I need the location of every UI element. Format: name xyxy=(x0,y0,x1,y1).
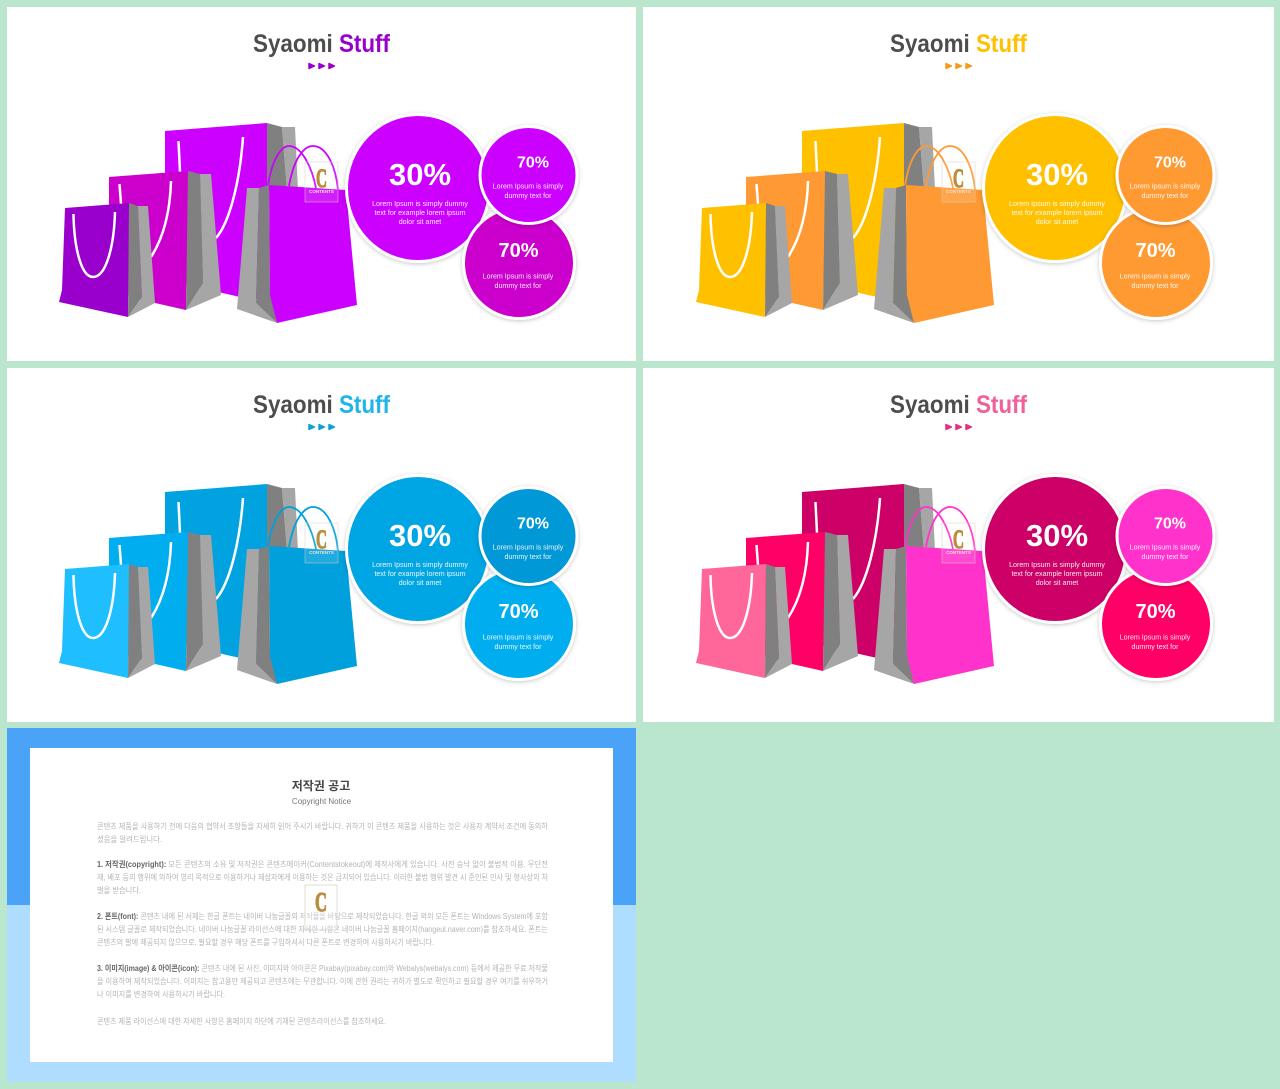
bag: medium xyxy=(109,532,221,671)
circle: 30%: 30% xyxy=(1026,518,1088,553)
circle: 30%: text for example lorem ipsum xyxy=(1011,209,1103,217)
circle: lower 70%: Lorem Ipsum is simply xyxy=(483,272,554,280)
notice intro: 셨음을 알려드립니다. xyxy=(97,834,162,844)
circle: upper 70%: dummy text for xyxy=(505,553,552,561)
notice intro xyxy=(97,821,549,844)
circle: upper 70%: 70% xyxy=(1154,516,1186,532)
circle: 30%: 30% xyxy=(1026,157,1088,192)
circle: upper 70%: dummy text for xyxy=(1142,192,1189,200)
circle: upper 70%: 70% xyxy=(517,516,549,532)
panel: copyright notice xyxy=(7,728,636,1082)
notice section 2: 콘텐츠의 팔에 제공되지 않으므로, 필요할 경우 해당 폰트를 구입하셔서 다른 폰트로 변경하여 사용하시기 바랍니다. xyxy=(97,937,434,947)
watermark xyxy=(305,885,337,930)
bag: medium xyxy=(109,171,221,310)
circle: lower 70% xyxy=(1100,208,1212,318)
circle: lower 70%: 70% xyxy=(1135,240,1176,262)
icon: three arrows xyxy=(309,64,334,68)
bag: front right xyxy=(874,507,994,684)
circle: 30%: text for example lorem ipsum xyxy=(374,209,466,217)
circle: upper 70%: 70% xyxy=(1154,154,1186,172)
notice section 1: 벌을 받습니다. xyxy=(97,885,141,895)
circle: 30% xyxy=(984,476,1126,622)
panel: yellow shopping bags xyxy=(643,7,1274,361)
circle: lower 70% xyxy=(464,568,574,680)
watermark xyxy=(942,523,975,563)
circle: lower 70%: Lorem Ipsum is simply xyxy=(483,634,554,642)
circle: 30%: Lorem Ipsum is simply dummy xyxy=(372,561,468,569)
notice heading: 저작권 공고 xyxy=(292,778,350,793)
watermark xyxy=(942,162,975,202)
circle: 30%: Lorem Ipsum is simply dummy xyxy=(1009,561,1105,569)
notice section 1: 1. 저작권(copyright): 모든 콘텐츠의 소유 및 저작권은 콘텐츠메이커(Contentstokeout)에 제작사에게 있습니다. 사전 승낙 없이 불법적 이용, 무단전 xyxy=(97,859,548,869)
title: Syaomi Stuff xyxy=(890,391,1028,419)
circle: upper 70% xyxy=(480,488,577,584)
panel: pink shopping bags xyxy=(643,368,1274,722)
circle: 30%: dolor sit amet xyxy=(399,579,441,587)
circle: lower 70% xyxy=(1100,568,1212,680)
watermark xyxy=(305,523,338,563)
bag: medium xyxy=(746,532,858,671)
circle: upper 70%: 70% xyxy=(517,154,549,172)
circle: lower 70%: Lorem Ipsum is simply xyxy=(1120,634,1191,642)
circle: 30%: text for example lorem ipsum xyxy=(374,570,466,578)
notice intro: 콘텐츠 제품을 사용하기 전에 다음의 협약서 조항들을 자세히 읽어 주시기 바랍니다. 귀하가 이 콘텐츠 제품을 사용하는 것은 사용자 계약서 조건에 동의하 xyxy=(97,821,549,831)
bag: front right xyxy=(874,146,994,323)
title: Syaomi Stuff xyxy=(890,30,1028,58)
bag: large back xyxy=(165,484,298,661)
notice section 1: 재, 배포 등의 행위에 의하여 영리 목적으로 이용하거나 제삼자에게 이용하는 것은 금지되어 있습니다. 이러한 불법 행위 발견 시 준인된 민사 및 형사상의 처 xyxy=(97,872,548,882)
circle: lower 70%: 70% xyxy=(498,240,539,262)
circle: 30%: text for example lorem ipsum xyxy=(1011,570,1103,578)
icon: three arrows xyxy=(309,424,334,430)
circle: 30%: dolor sit amet xyxy=(1036,218,1078,226)
notice section 1 xyxy=(97,859,548,895)
bag: front right xyxy=(237,507,357,684)
circle: upper 70% xyxy=(480,126,577,224)
title: Syaomi Stuff xyxy=(253,30,391,58)
notice closing line: 콘텐츠 제품 라이선스에 대한 자세한 사항은 홈페이지 하단에 기재된 콘텐츠라이선스를 참조하세요. xyxy=(97,1016,386,1026)
circle: lower 70%: 70% xyxy=(498,601,539,623)
circle: lower 70%: dummy text for xyxy=(1132,282,1179,290)
circle: lower 70%: Lorem Ipsum is simply xyxy=(1120,272,1191,280)
circle: lower 70%: dummy text for xyxy=(495,643,542,651)
circle: lower 70% xyxy=(464,208,574,318)
watermark xyxy=(305,162,338,202)
circle: upper 70% xyxy=(1117,488,1214,584)
notice section 2 xyxy=(97,911,549,947)
bag: front right xyxy=(237,146,357,323)
notice section 3 xyxy=(97,963,548,999)
circle: upper 70%: Lorem Ipsum is simply xyxy=(493,544,564,552)
circle: upper 70%: dummy text for xyxy=(1142,553,1189,561)
bag: large back xyxy=(802,484,935,661)
notice section 2: 된 시스템 글꼴로 제작되었습니다. 네이버 나눔글꼴 라이선스에 대한 자세한 사항은 네이버 나눔글꼴 홈페이지(hangeul.naver.com)를 참조하세요. 폰트는 xyxy=(97,924,548,934)
notice section 2: 2. 폰트(font): 콘텐츠 내에 된 서체는 한글 폰트는 네이버 나눔글꼴의 저작물을 바탕으로 제작되었습니다. 한글 외의 모든 폰트는 Windows System에 포함 xyxy=(97,911,549,921)
circle: upper 70%: Lorem Ipsum is simply xyxy=(1130,544,1201,552)
circle: upper 70%: Lorem Ipsum is simply xyxy=(1130,182,1201,190)
notice section 3: 3. 이미지(image) & 아이콘(icon): 콘텐츠 내에 된 사진, 이미지와 아이콘은 Pixabay(pixabay.com)와 Webalys(webalys.com) 등에서 제공한 무료 저작물 xyxy=(97,963,548,973)
panel: purple shopping bags xyxy=(7,7,636,361)
bag: small left xyxy=(59,203,155,317)
circle: 30% xyxy=(346,114,490,262)
panel: blue shopping bags xyxy=(7,368,636,722)
circle: upper 70%: dummy text for xyxy=(505,192,552,200)
notice subheading: Copyright Notice xyxy=(292,797,352,806)
circle: 30%: Lorem Ipsum is simply dummy xyxy=(372,200,468,208)
bag: small left xyxy=(59,564,155,678)
circle: 30%: dolor sit amet xyxy=(399,218,441,226)
circle: lower 70%: 70% xyxy=(1135,601,1176,623)
icon: three arrows xyxy=(946,424,972,430)
title: Syaomi Stuff xyxy=(253,391,391,419)
bag: small left xyxy=(696,564,792,678)
circle: 30%: 30% xyxy=(389,157,451,192)
circle: upper 70%: Lorem Ipsum is simply xyxy=(493,182,564,190)
circle: 30%: Lorem Ipsum is simply dummy xyxy=(1009,200,1105,208)
circle: 30% xyxy=(984,114,1126,262)
circle: lower 70%: dummy text for xyxy=(1132,643,1179,651)
bag: medium xyxy=(746,171,858,310)
icon: three arrows xyxy=(946,64,972,68)
notice section 3: 나 이미지를 변경하여 사용하시기 바랍니다. xyxy=(97,989,225,999)
bag: large back xyxy=(802,123,935,300)
notice section 3: 을 이용하여 제작되었습니다. 이미지는 참고용만 제공되고 콘텐츠에는 무관합니다. 이에 관한 권리는 귀하가 별도로 확인하고 필요할 경우 여기를 쉬우하거 xyxy=(97,976,548,986)
circle: 30%: dolor sit amet xyxy=(1036,579,1078,587)
bag: small left xyxy=(696,203,792,317)
bag: large back xyxy=(165,123,298,300)
circle: 30% xyxy=(346,476,490,622)
circle: 30%: 30% xyxy=(389,518,451,553)
watermark: C xyxy=(315,887,327,917)
circle: lower 70%: dummy text for xyxy=(495,282,542,290)
circle: upper 70% xyxy=(1117,126,1214,224)
